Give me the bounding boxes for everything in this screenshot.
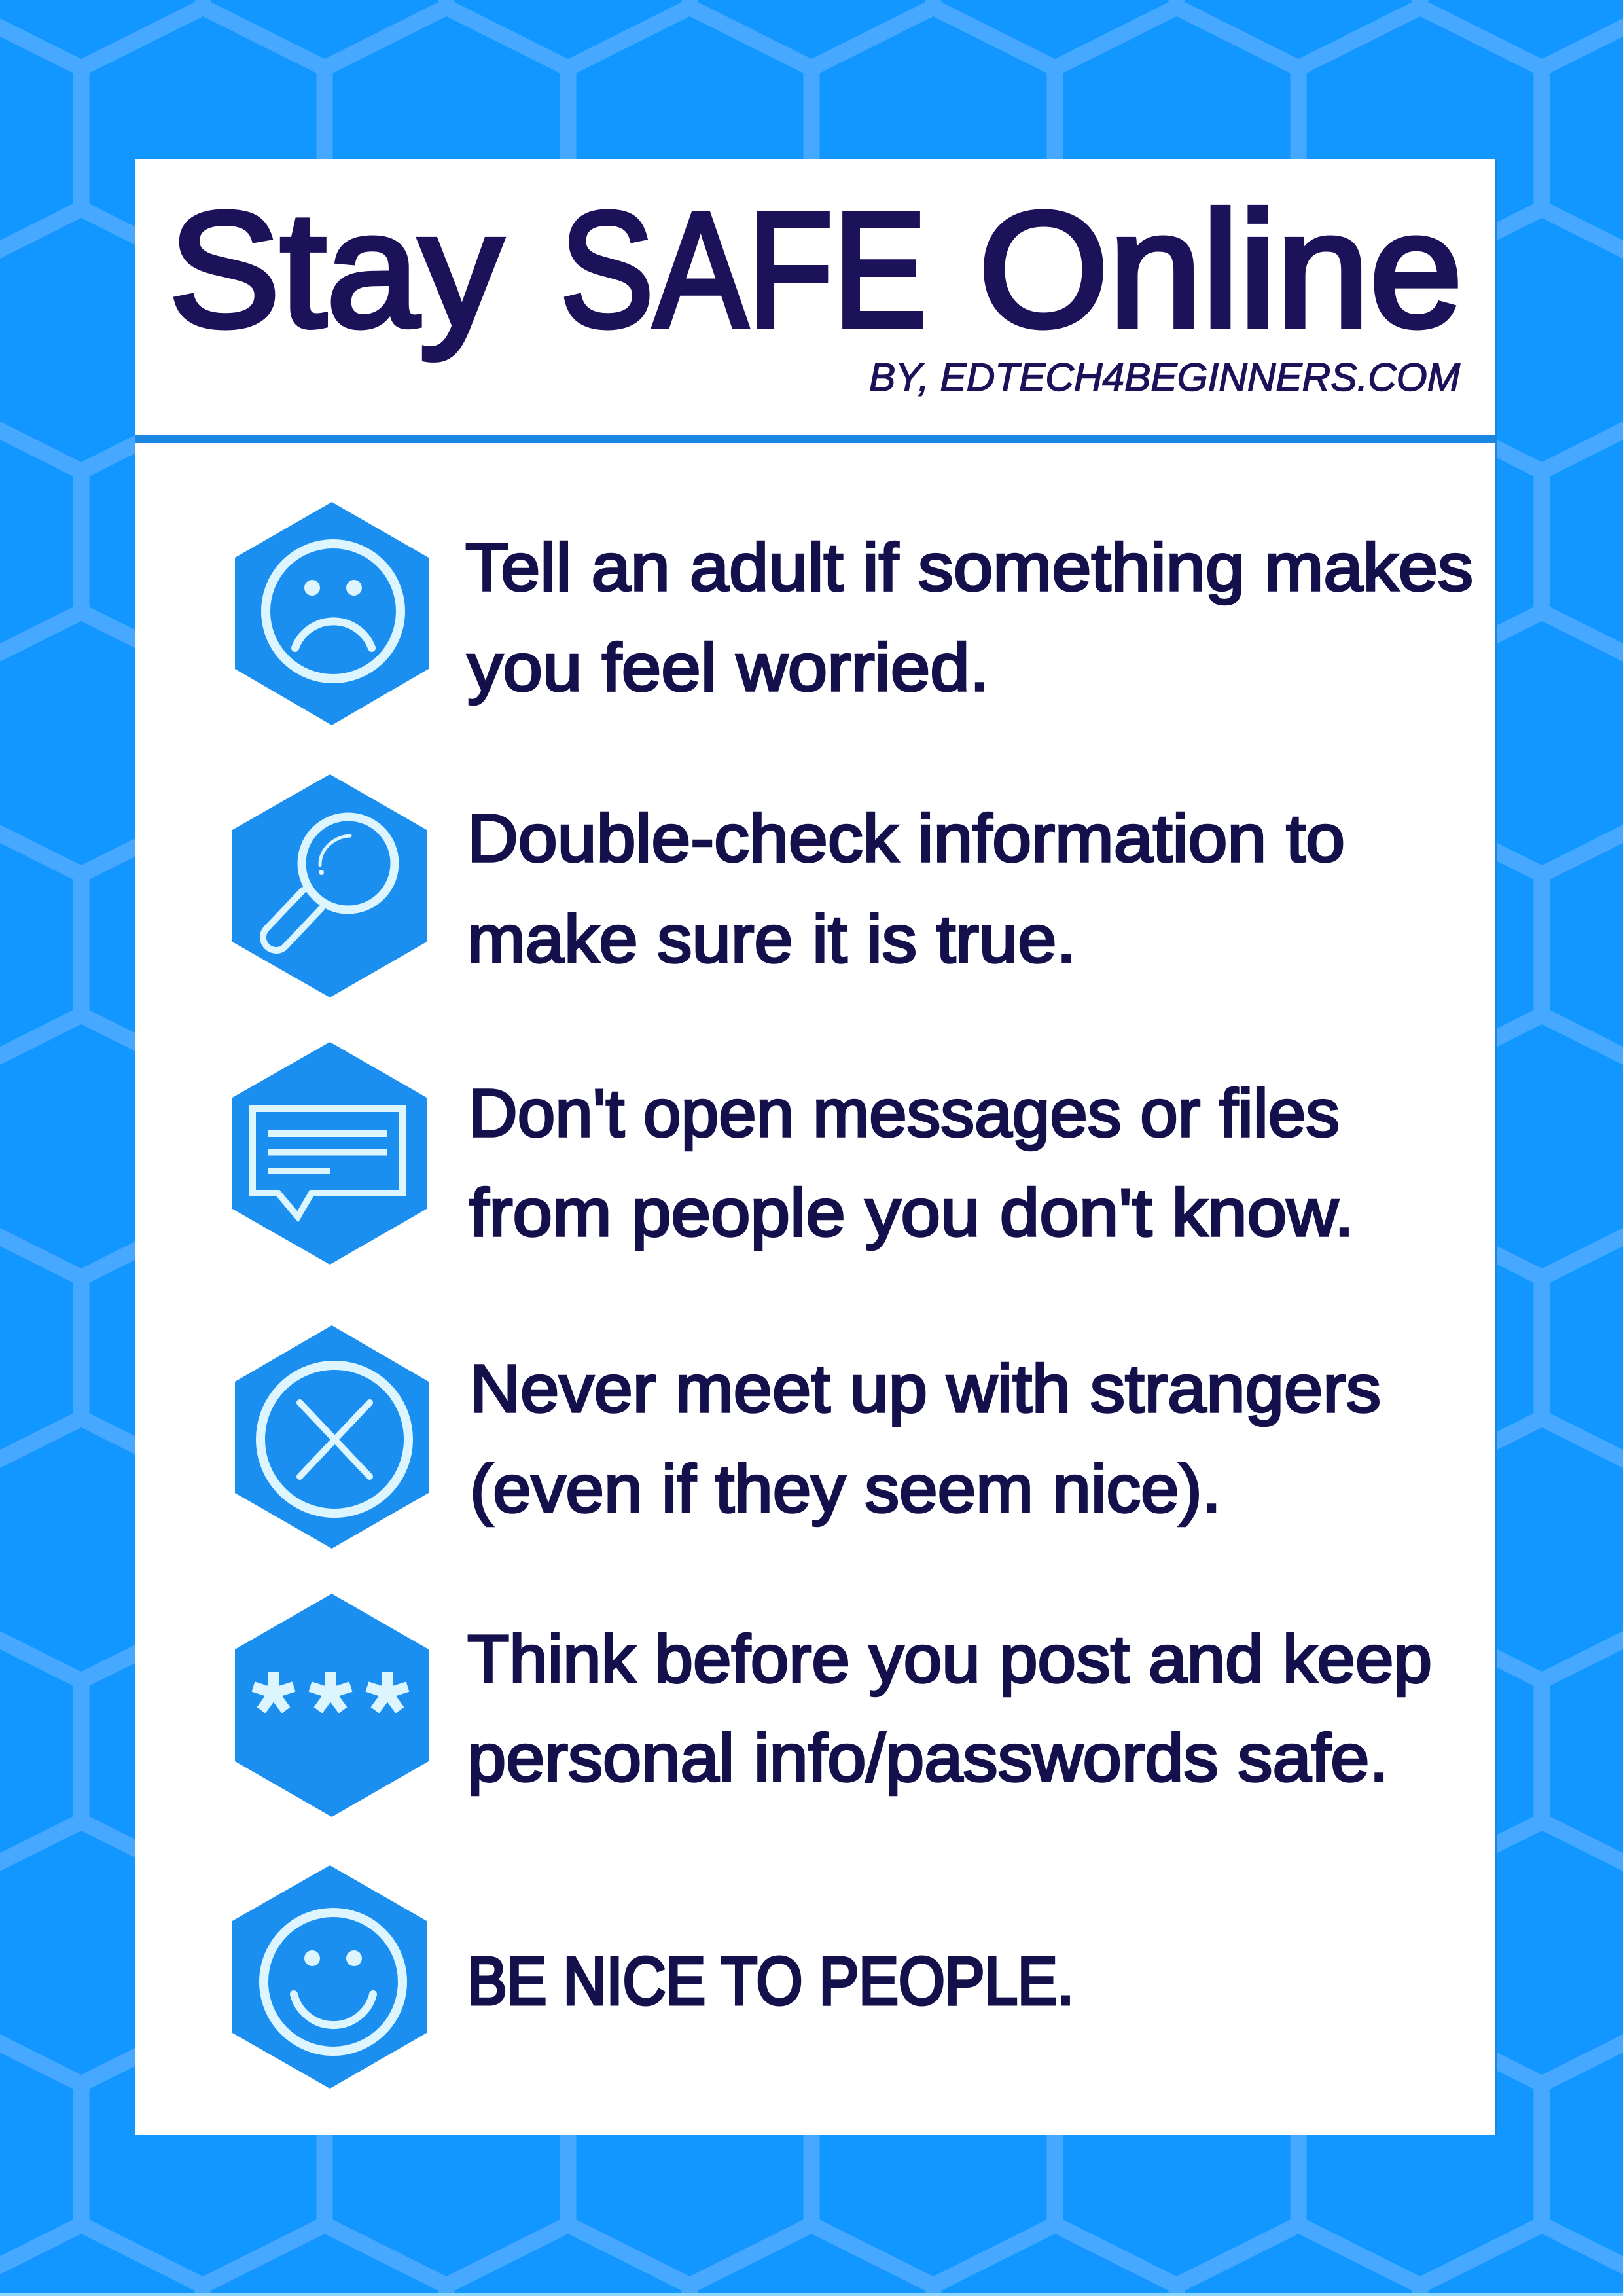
icon: cross in circle in hexagon (235, 1325, 429, 1549)
panel: tip 3 (232, 1042, 1354, 1265)
title: Stay (169, 178, 503, 361)
text: tip 5: Think before you post and keep (467, 1621, 1432, 1696)
text: tip 1 (465, 529, 1473, 705)
header divider (135, 435, 1495, 443)
text: tip 2 (467, 800, 1345, 977)
icon: message bubble in hexagon (232, 1042, 427, 1265)
text: tip 1: you feel worried. (467, 630, 990, 705)
panel: tip 4 (235, 1325, 1381, 1549)
panel: tip 6 (232, 1865, 1074, 2089)
panel: header (169, 178, 1463, 399)
text: tip 1: Tell an adult if something makes (465, 529, 1473, 605)
title (169, 178, 1463, 361)
byline: BY, EDTECH4BEGINNERS.COM (869, 355, 1460, 399)
text: tip 6: BE NICE TO PEOPLE. (467, 1943, 1074, 2018)
text: tip 5: personal info/passwords safe. (467, 1720, 1389, 1795)
text: tip 5 (467, 1621, 1432, 1795)
icon: password asterisks in hexagon (235, 1594, 429, 1817)
title: Online (978, 178, 1463, 361)
text: tip 4: Never meet up with strangers (470, 1351, 1381, 1426)
icon: smiley face in hexagon (232, 1865, 427, 2089)
text: tip 4: (even if they seem nice). (470, 1451, 1221, 1526)
text: tip 2: Double-check information to (467, 800, 1345, 876)
icon: sad face in hexagon (235, 502, 429, 725)
text: tip 3: Don't open messages or files (469, 1075, 1340, 1151)
panel: tip 1 (235, 502, 1473, 725)
text: tip 4 (470, 1351, 1381, 1526)
panel: white card (135, 159, 1497, 2135)
text: tip 3 (469, 1075, 1354, 1250)
panel: tip 5 (235, 1594, 1432, 1817)
text: tip 2: make sure it is true. (467, 901, 1076, 977)
panel: tip 2 (232, 774, 1345, 997)
text: tip 3: from people you don't know. (469, 1175, 1354, 1250)
title: SAFE (560, 178, 927, 361)
icon: magnifying glass in hexagon (232, 774, 427, 997)
